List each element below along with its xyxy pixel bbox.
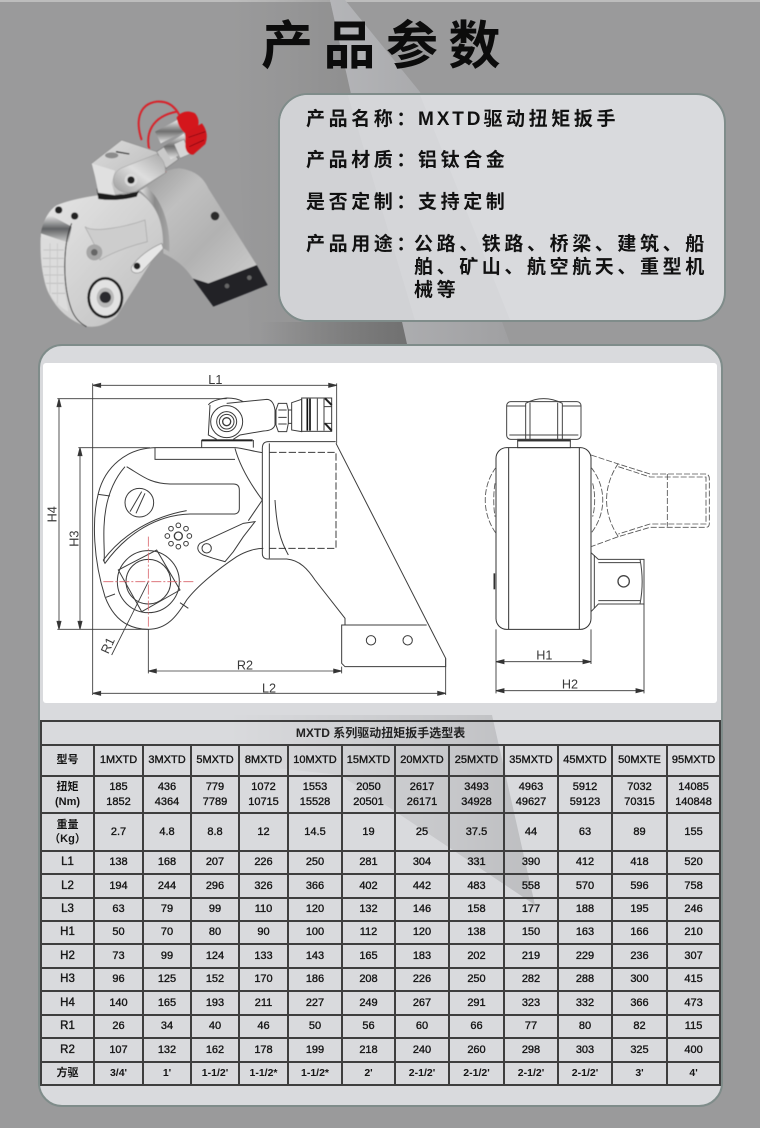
row: square drive: 1-1/2' — [202, 1067, 228, 1079]
row: H2: 229 — [576, 950, 594, 962]
row: H4: 332 — [576, 997, 594, 1009]
row: L3: 79 — [161, 903, 173, 915]
row: R1: 46 — [257, 1020, 270, 1032]
row: weight: 2.7 — [111, 826, 126, 838]
row: L2: 758 — [684, 880, 703, 892]
row: L1 — [61, 856, 703, 868]
row: weight: 25 — [416, 826, 428, 838]
row: weight: 8.8 — [207, 826, 223, 838]
row: torque: 1072 — [251, 781, 276, 793]
row: R1: 26 — [112, 1020, 125, 1032]
row: L1: 207 — [206, 856, 224, 868]
row: model: 50MXTE — [618, 754, 661, 766]
row: H1: 166 — [630, 926, 649, 938]
row: torque: (Nm) — [55, 796, 80, 808]
row: torque: 4963 — [519, 781, 543, 793]
dimension labels: L2 — [262, 681, 276, 695]
row: L2: 296 — [206, 880, 224, 892]
row: H4: 366 — [630, 997, 649, 1009]
row: model: 3MXTD — [148, 754, 186, 766]
arm outline — [262, 442, 446, 667]
dimension labels: L1 — [208, 373, 222, 387]
row: L3: 146 — [413, 903, 431, 915]
row: L1: 304 — [413, 856, 431, 868]
row: H1: 70 — [161, 926, 173, 938]
row: model: 8MXTD — [245, 754, 282, 766]
row: H2: 307 — [684, 950, 703, 962]
row: torque: 5912 — [573, 781, 597, 793]
row: H2: 143 — [306, 950, 324, 962]
row: weight: 44 — [525, 826, 537, 838]
row: L2: 326 — [254, 880, 273, 892]
chart: front-view dimension drawing — [484, 398, 710, 694]
row: H2: 73 — [112, 950, 125, 962]
row: L3: 188 — [576, 903, 594, 915]
row: R2: 298 — [522, 1044, 540, 1056]
row: H1: 210 — [684, 926, 703, 938]
row: H4: 193 — [206, 997, 224, 1009]
dimension lines — [57, 383, 446, 695]
row: square drive: 3/4' — [110, 1067, 127, 1079]
table title: MXTD 系列驱动扭矩扳手选型表 — [296, 726, 465, 740]
row: square drive: 2-1/2' — [518, 1067, 544, 1079]
row: torque: 15528 — [300, 796, 330, 808]
row: L2: L2 — [61, 880, 74, 892]
row: square drive: 方驱 — [56, 1067, 78, 1079]
row: torque: 779 — [206, 781, 224, 793]
row: H3: 250 — [467, 973, 486, 985]
row: H3: 300 — [630, 973, 649, 985]
row: H2: 165 — [359, 950, 378, 962]
row: R2: 218 — [359, 1044, 378, 1056]
row: torque: 2617 — [410, 781, 434, 793]
title: 产品参数 — [261, 18, 511, 76]
centre lines — [103, 537, 193, 627]
row: L1: 520 — [684, 856, 703, 868]
row: model: 10MXTD — [293, 754, 337, 766]
row: H2: 236 — [630, 950, 649, 962]
row: H2: 183 — [413, 950, 431, 962]
row: weight: 19 — [362, 826, 375, 838]
row: model: 25MXTD — [455, 754, 498, 766]
row: L3: L3 — [61, 903, 74, 915]
icon: red quick couplers — [139, 102, 207, 173]
row: square drive — [56, 1066, 698, 1079]
panel: product information — [278, 93, 726, 322]
row: H2: H2 — [60, 950, 75, 962]
value: product use: 公路、铁路、桥梁、建筑、船 — [414, 234, 708, 255]
dimension labels: R1 — [98, 635, 118, 656]
row: R1: 80 — [579, 1020, 591, 1032]
row: H1: 50 — [112, 926, 125, 938]
row: H3: 208 — [359, 973, 378, 985]
row: square drive: 2-1/2' — [409, 1067, 435, 1079]
row: square drive: 2' — [364, 1067, 373, 1079]
row: L1: 226 — [254, 856, 273, 868]
row: torque: 7789 — [203, 796, 227, 808]
row: square drive: 1-1/2* — [301, 1067, 329, 1079]
row: L2: 194 — [109, 880, 128, 892]
row: H1 — [60, 926, 703, 938]
row: L2: 558 — [522, 880, 540, 892]
row: H1: 120 — [413, 926, 431, 938]
row: torque: 1852 — [106, 796, 131, 808]
row: torque: 140848 — [675, 796, 712, 808]
row: R1: 56 — [362, 1020, 375, 1032]
row: L1: 250 — [306, 856, 324, 868]
row: L3 — [61, 903, 703, 915]
row: H1: 163 — [576, 926, 594, 938]
value: customisation: 支持定制 — [418, 192, 508, 213]
row: torque: 7032 — [627, 781, 652, 793]
row: model: 45MXTD — [563, 754, 607, 766]
row: R1: 66 — [470, 1020, 483, 1032]
row: L3: 110 — [255, 903, 272, 915]
row: weight: 155 — [684, 826, 703, 838]
row: H3: 186 — [306, 973, 324, 985]
row: H4: 227 — [306, 997, 324, 1009]
row: L2: 570 — [576, 880, 594, 892]
row: H3: 152 — [206, 973, 224, 985]
row: weight: 重量 — [56, 818, 78, 830]
row: model — [56, 754, 715, 766]
row: H3: 282 — [522, 973, 540, 985]
label: product material: 产品材质： — [306, 150, 419, 171]
dimension labels: H3 — [67, 531, 81, 547]
row: L3: 132 — [359, 903, 378, 915]
row: H4: 291 — [467, 997, 486, 1009]
row: H3 — [60, 973, 703, 985]
row: H1: 80 — [209, 926, 221, 938]
row: weight: 4.8 — [159, 826, 175, 838]
panel: white drawing area — [43, 363, 717, 703]
label: product use: 产品用途： — [306, 234, 419, 255]
row: torque: 185 — [109, 781, 128, 793]
value: product material: 铝钛合金 — [418, 150, 508, 171]
row: R2: R2 — [60, 1044, 75, 1056]
row: model: 型号 — [56, 754, 78, 766]
row: R1: 60 — [416, 1020, 428, 1032]
row: H1: 112 — [360, 926, 377, 938]
row: torque: 436 — [158, 781, 176, 793]
row: weight: （Kg） — [49, 833, 86, 845]
row: R2: 260 — [467, 1044, 486, 1056]
row: H4: 249 — [359, 997, 378, 1009]
row: weight: 14.5 — [304, 826, 326, 838]
row: H2: 202 — [467, 950, 486, 962]
row: R2: 132 — [158, 1044, 176, 1056]
chart: front-view dimension drawing: H1 — [536, 648, 552, 662]
row: model: 15MXTD — [347, 754, 390, 766]
row: model: 95MXTD — [672, 754, 715, 766]
row: R1: R1 — [60, 1020, 75, 1032]
dashed ghost handle — [485, 455, 709, 547]
row: H3: 125 — [158, 973, 176, 985]
icon: rear arm with black tip — [140, 168, 268, 307]
row: L1: 138 — [109, 856, 128, 868]
row: H1: 100 — [306, 926, 324, 938]
wrench head outline — [94, 448, 263, 629]
row: H2: 99 — [161, 950, 173, 962]
row: H4: 323 — [522, 997, 540, 1009]
row: square drive: 1-1/2* — [249, 1067, 278, 1079]
top cap — [507, 399, 581, 448]
row: H4: 140 — [109, 997, 128, 1009]
row: L2: 596 — [630, 880, 649, 892]
row: R2: 107 — [109, 1044, 128, 1056]
row: R1 — [60, 1020, 702, 1032]
row: model: 1MXTD — [100, 754, 137, 766]
dimension labels — [46, 373, 276, 695]
row: H3: 288 — [576, 973, 594, 985]
row: L1: 390 — [522, 856, 540, 868]
row: L1: 331 — [467, 856, 486, 868]
panel: specifications card — [38, 344, 723, 1107]
value: product use — [414, 234, 708, 301]
row: L3: 195 — [630, 903, 649, 915]
body — [494, 448, 591, 629]
row: R1: 50 — [309, 1020, 321, 1032]
swivel and coupler — [202, 398, 332, 448]
row: square drive: 1' — [163, 1067, 171, 1079]
row: R1: 34 — [161, 1020, 173, 1032]
row: torque: 3493 — [464, 781, 489, 793]
label: product name: 产品名称： — [306, 109, 419, 130]
label: customisation: 是否定制： — [306, 192, 419, 213]
icon: swivel block — [92, 140, 166, 200]
row: R2: 162 — [206, 1044, 224, 1056]
row: H4: 473 — [684, 997, 703, 1009]
row: R2: 303 — [576, 1044, 594, 1056]
row: torque: 14085 — [678, 781, 709, 793]
dimension lines and labels — [496, 604, 644, 693]
row: L2: 402 — [359, 880, 378, 892]
row: H2 — [60, 950, 703, 962]
row: torque: 扭矩 — [56, 781, 78, 793]
row: H1: 90 — [257, 926, 270, 938]
row: torque: 4364 — [155, 796, 179, 808]
row: torque: 20501 — [353, 796, 384, 808]
icon: main head body — [41, 193, 163, 327]
row: L2: 442 — [413, 880, 431, 892]
row: L3: 120 — [306, 903, 324, 915]
row: H1: 150 — [522, 926, 540, 938]
row: H4: 165 — [158, 997, 176, 1009]
row: L1: 168 — [158, 856, 176, 868]
row: H3: 415 — [684, 973, 703, 985]
row: R2: 199 — [306, 1044, 324, 1056]
row: square drive: 3' — [635, 1067, 644, 1079]
row: L2: 483 — [467, 880, 486, 892]
row: weight: 37.5 — [466, 826, 487, 838]
row: square drive: 4' — [689, 1067, 698, 1079]
row: H4: H4 — [60, 997, 75, 1009]
row: H2: 219 — [522, 950, 540, 962]
row: H3: 170 — [254, 973, 273, 985]
row: H1: H1 — [60, 926, 75, 938]
row: model: 35MXTD — [509, 754, 553, 766]
row: model: 5MXTD — [196, 754, 234, 766]
chart: front-view dimension drawing: H2 — [562, 678, 578, 692]
row: square drive: 2-1/2' — [463, 1067, 490, 1079]
row: L3: 158 — [467, 903, 486, 915]
row: L2: 366 — [306, 880, 324, 892]
row: R1: 82 — [633, 1020, 646, 1032]
row: torque: 70315 — [624, 796, 655, 808]
square drive — [591, 553, 644, 612]
row: R1: 115 — [685, 1020, 702, 1032]
row: R1: 77 — [525, 1020, 537, 1032]
row: R2 — [60, 1044, 703, 1056]
row: L2: 244 — [158, 880, 176, 892]
row: L1: 412 — [576, 856, 594, 868]
table title — [49, 726, 715, 1079]
row: H3: 226 — [413, 973, 431, 985]
row: weight: 89 — [633, 826, 646, 838]
row: torque: 49627 — [516, 796, 546, 808]
row: square drive: 2-1/2' — [572, 1067, 598, 1079]
row: H2: 124 — [206, 950, 224, 962]
table: MXTD selection table — [40, 720, 721, 1086]
row: L3: 99 — [209, 903, 221, 915]
row: weight: 63 — [579, 826, 591, 838]
row: R1: 40 — [209, 1020, 221, 1032]
row: L3: 63 — [112, 903, 125, 915]
dimension labels: H4 — [46, 506, 60, 522]
row: torque: 59123 — [570, 796, 600, 808]
row: H2: 133 — [254, 950, 273, 962]
row: L3: 177 — [522, 903, 540, 915]
row: L2 — [61, 880, 703, 892]
product photo: hydraulic torque wrench — [40, 100, 268, 328]
dimension labels: R2 — [237, 658, 253, 672]
row: H4: 267 — [413, 997, 431, 1009]
value: product name: MXTD驱动扭矩扳手 — [418, 109, 619, 130]
row: R2: 325 — [630, 1044, 649, 1056]
value: product use: 械等 — [414, 280, 459, 301]
row: L1: 281 — [359, 856, 378, 868]
row: R2: 400 — [684, 1044, 703, 1056]
chart: side-view dimension drawing — [46, 373, 446, 696]
row: model: 20MXTD — [400, 754, 444, 766]
row: weight: 12 — [257, 826, 270, 838]
row: torque: 10715 — [248, 796, 279, 808]
row: H1: 138 — [467, 926, 486, 938]
row: R2: 178 — [254, 1044, 273, 1056]
row: torque: 34928 — [461, 796, 492, 808]
row: R2: 240 — [413, 1044, 431, 1056]
row: weight — [49, 818, 703, 845]
row: torque: 26171 — [407, 796, 437, 808]
row: H4: 211 — [255, 997, 272, 1009]
row: L1: 418 — [630, 856, 649, 868]
row: H3: 96 — [112, 973, 125, 985]
row: H3: H3 — [60, 973, 75, 985]
row: L3: 246 — [684, 903, 703, 915]
row: L1: L1 — [61, 856, 74, 868]
row: torque: 2050 — [356, 781, 381, 793]
row: H4 — [60, 997, 703, 1009]
row: torque: 1553 — [303, 781, 327, 793]
value: product use: 舶、矿山、航空航天、重型机 — [414, 257, 708, 278]
row: torque — [55, 780, 712, 808]
